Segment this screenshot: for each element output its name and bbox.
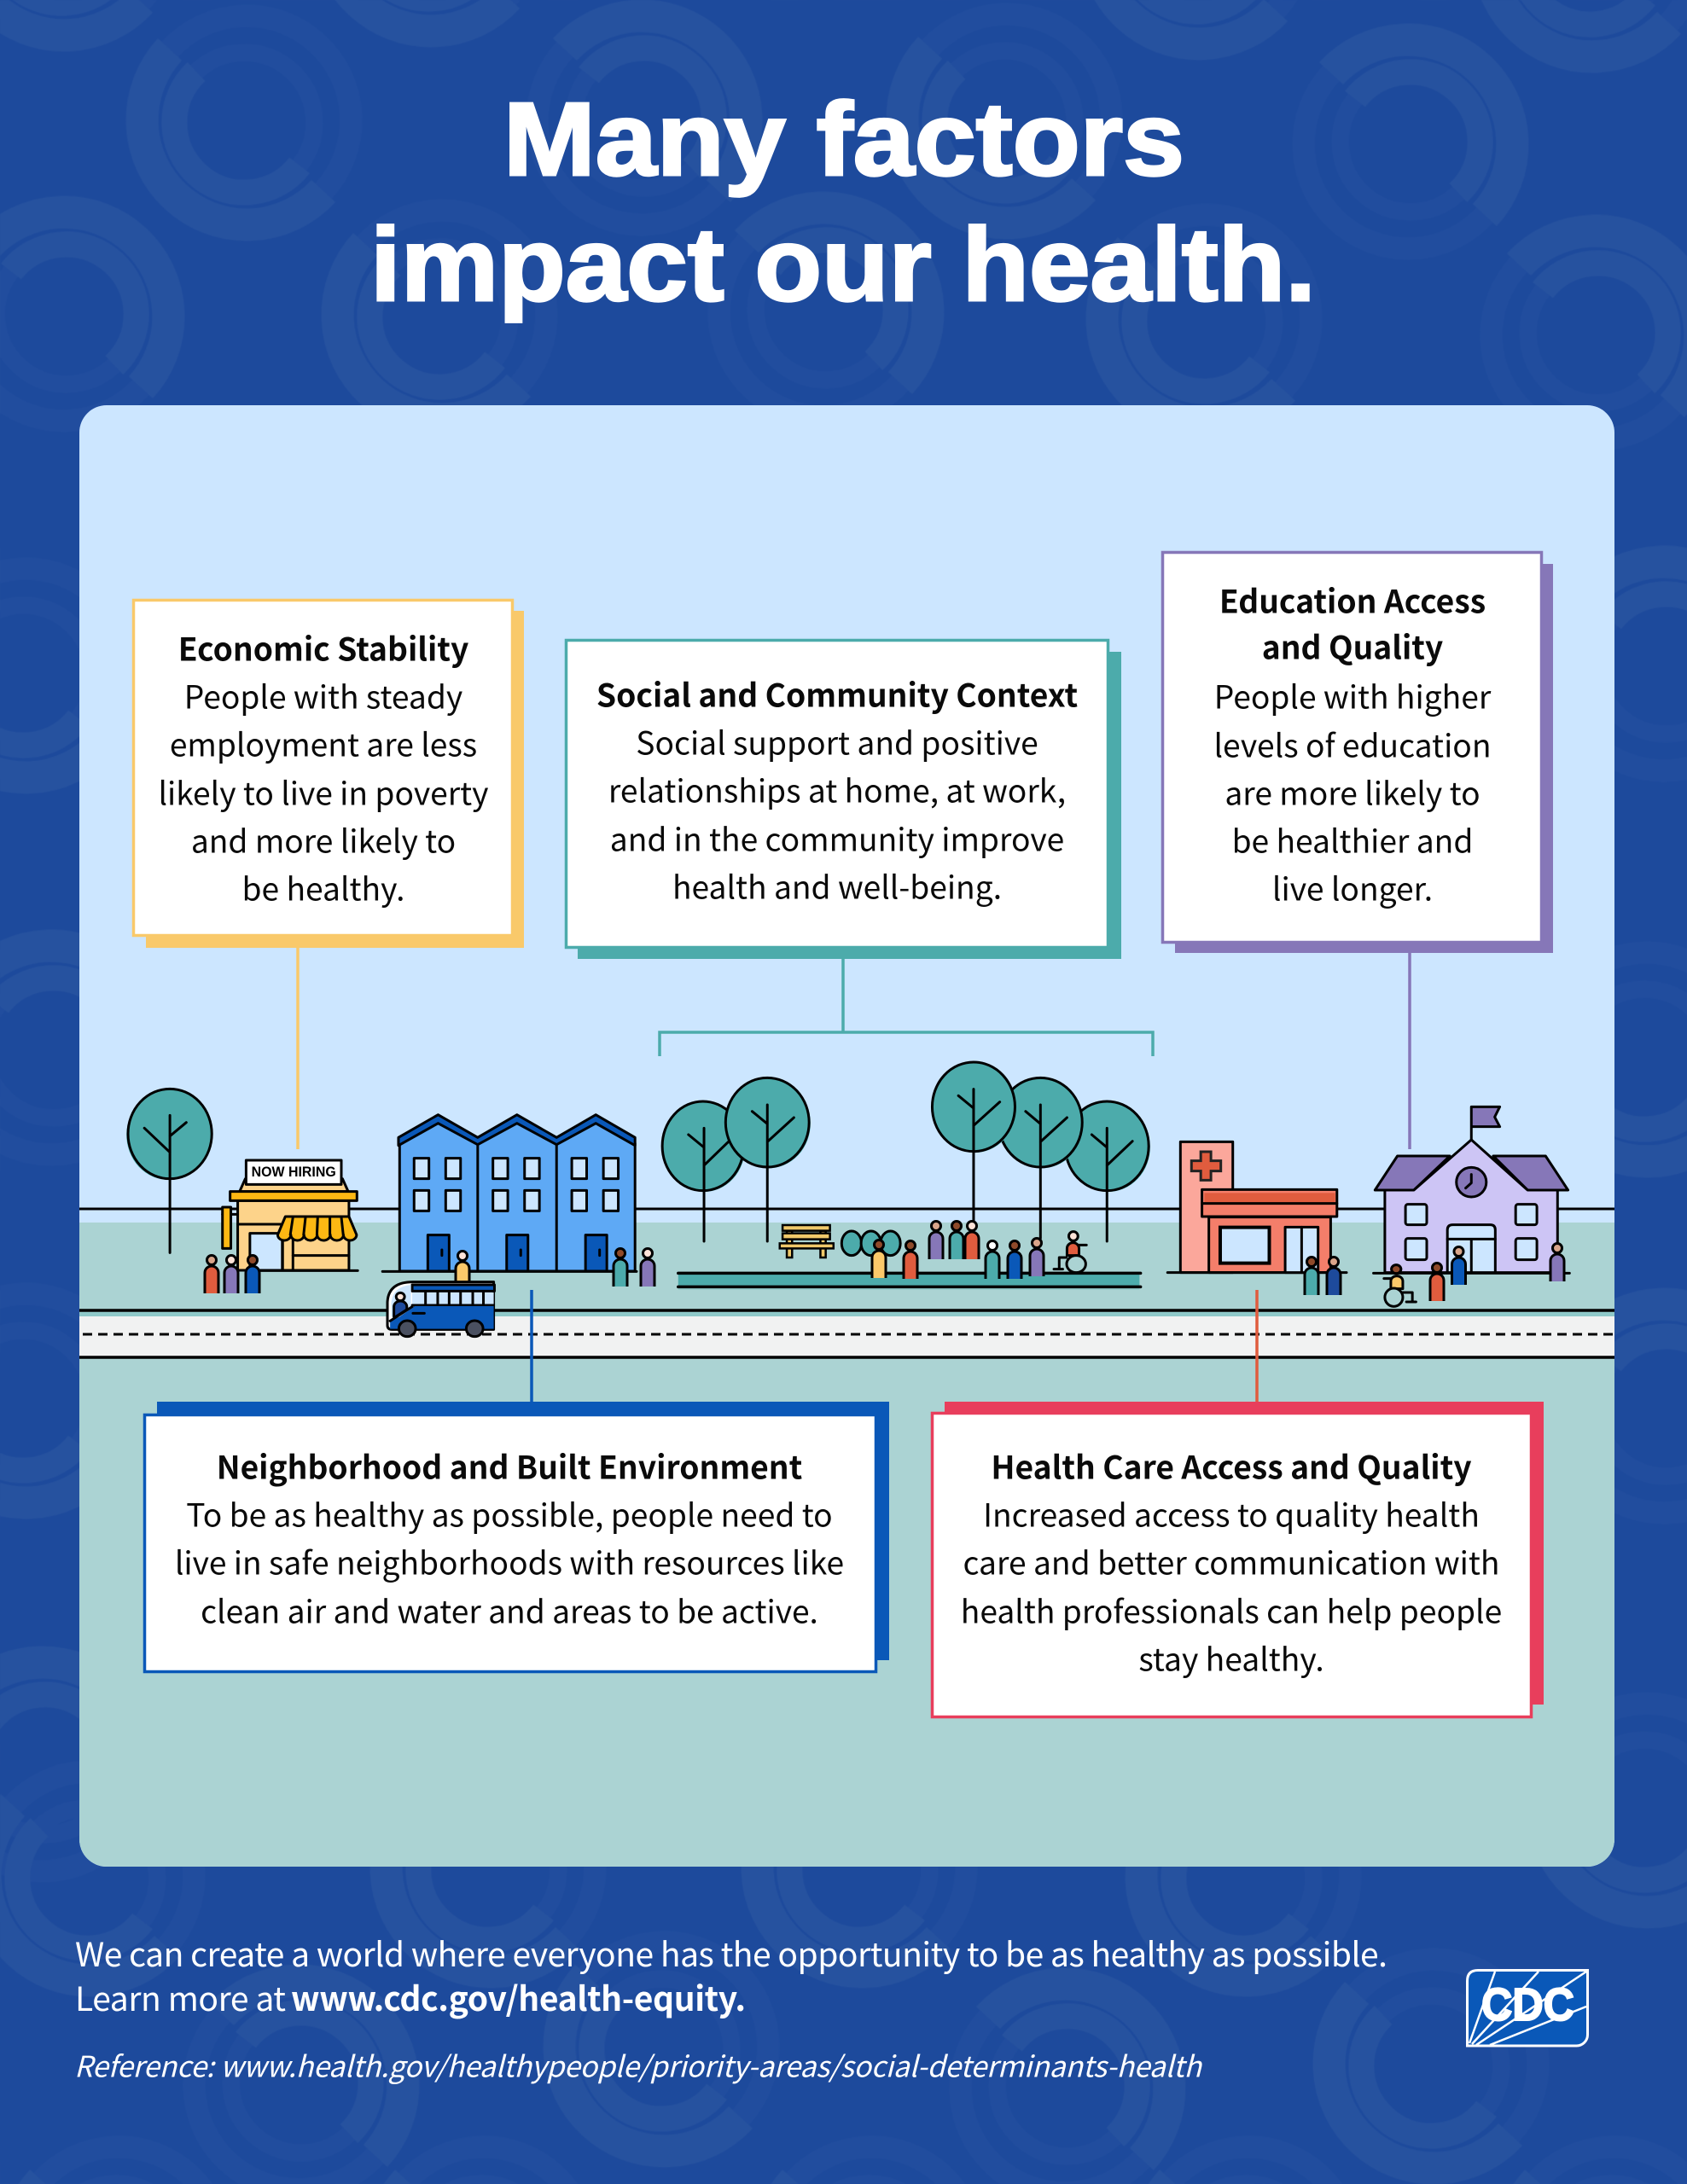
- card: health care access and quality: stay healthy.: [1138, 1635, 1324, 1681]
- card: neighborhood and built environment: live in safe neighborhoods with resources like: [175, 1537, 844, 1583]
- card: health care access and quality: Health Care Access and Quality: [991, 1442, 1472, 1488]
- connector: economic stability: [296, 948, 300, 1149]
- icon: CDC logo: CDC: [1481, 1979, 1574, 2030]
- card: health care access and quality: health professionals can help people: [961, 1587, 1502, 1633]
- connector: education: [1408, 953, 1411, 1149]
- icon: park trees left: [662, 1077, 811, 1241]
- card: health care access and quality: [932, 1402, 1544, 1716]
- card: social and community context: relationships at home, at work,: [608, 766, 1066, 812]
- card: economic stability: People with steady: [184, 672, 462, 718]
- card: education access and quality: Education Access: [1219, 577, 1486, 623]
- connector: neighborhood: [530, 1290, 533, 1402]
- icon: park path: [678, 1273, 1141, 1290]
- icon: store with now hiring sign: NOW HIRING: [252, 1164, 336, 1180]
- title: [370, 81, 1316, 322]
- icon: park shrubs: [841, 1231, 900, 1256]
- connector: social and community bracket: [660, 959, 1153, 1056]
- card: education access and quality: live longer.: [1272, 863, 1433, 909]
- card: economic stability: likely to live in poverty: [158, 768, 489, 814]
- card: economic stability: and more likely to: [191, 816, 456, 862]
- footer text: www.cdc.gov/health-equity.: [291, 1973, 746, 2021]
- person in wheelchair: park: [1054, 1232, 1086, 1273]
- person in wheelchair: school: [1384, 1265, 1416, 1306]
- icon: park bench: [780, 1225, 834, 1258]
- icon: store with now hiring sign: [223, 1160, 358, 1270]
- card: economic stability: Economic Stability: [178, 624, 468, 671]
- card: social and community context: [567, 640, 1121, 959]
- title: Many factors: [503, 81, 1184, 197]
- icon: apartment row houses: [382, 1115, 637, 1271]
- icon: park trees right: [932, 1062, 1150, 1241]
- icon: health clinic: [1167, 1141, 1347, 1273]
- footer text: We can create a world where everyone has the opportunity to be as healthy as possible.: [75, 1929, 1387, 1977]
- connector: health care: [1255, 1290, 1259, 1402]
- people at clinic: [1305, 1258, 1341, 1295]
- icon: lone tree: [126, 1089, 212, 1252]
- card: social and community context: and in the community improve: [610, 814, 1064, 860]
- card: education access and quality: levels of education: [1213, 720, 1492, 766]
- card: social and community context: Social and Community Context: [596, 671, 1078, 717]
- card: neighborhood and built environment: [145, 1402, 889, 1672]
- icon: bus: [387, 1282, 494, 1337]
- footer text: [74, 1929, 1387, 2085]
- card: education access and quality: and Quality: [1262, 623, 1443, 669]
- card: neighborhood and built environment: Neighborhood and Built Environment: [217, 1442, 802, 1488]
- road: [79, 1310, 1614, 1357]
- card: economic stability: [133, 601, 524, 948]
- panel: neighborhood scene background: [79, 405, 1614, 1867]
- card: education access and quality: are more likely to: [1225, 768, 1480, 814]
- card: social and community context: Social support and positive: [636, 718, 1038, 764]
- people near apartments: [456, 1249, 654, 1289]
- footer text: Learn more at: [75, 1973, 286, 2021]
- card: education access and quality: be healthier and: [1232, 816, 1473, 862]
- card: social and community context: health and well-being.: [672, 862, 1002, 908]
- people at school: [1430, 1244, 1564, 1301]
- people near store: [205, 1256, 259, 1293]
- card: economic stability: employment are less: [170, 720, 477, 766]
- card: neighborhood and built environment: clean air and water and areas to be active.: [201, 1587, 818, 1633]
- card: health care access and quality: care and better communication with: [963, 1537, 1500, 1583]
- card: economic stability: be healthy.: [242, 863, 404, 909]
- card: health care access and quality: Increased access to quality health: [983, 1490, 1480, 1536]
- card: education access and quality: People with higher: [1214, 672, 1492, 718]
- people in the park: [872, 1222, 1044, 1279]
- footer text: Reference: www.health.gov/healthypeople/priority-areas/social-determinants-health: [74, 2044, 1202, 2085]
- icon: school: [1374, 1107, 1569, 1273]
- card: neighborhood and built environment: To be as healthy as possible, people need to: [186, 1490, 833, 1536]
- icon: CDC logo: [1468, 1971, 1587, 2046]
- title: impact our health.: [370, 206, 1316, 322]
- card: education access and quality: [1162, 553, 1553, 953]
